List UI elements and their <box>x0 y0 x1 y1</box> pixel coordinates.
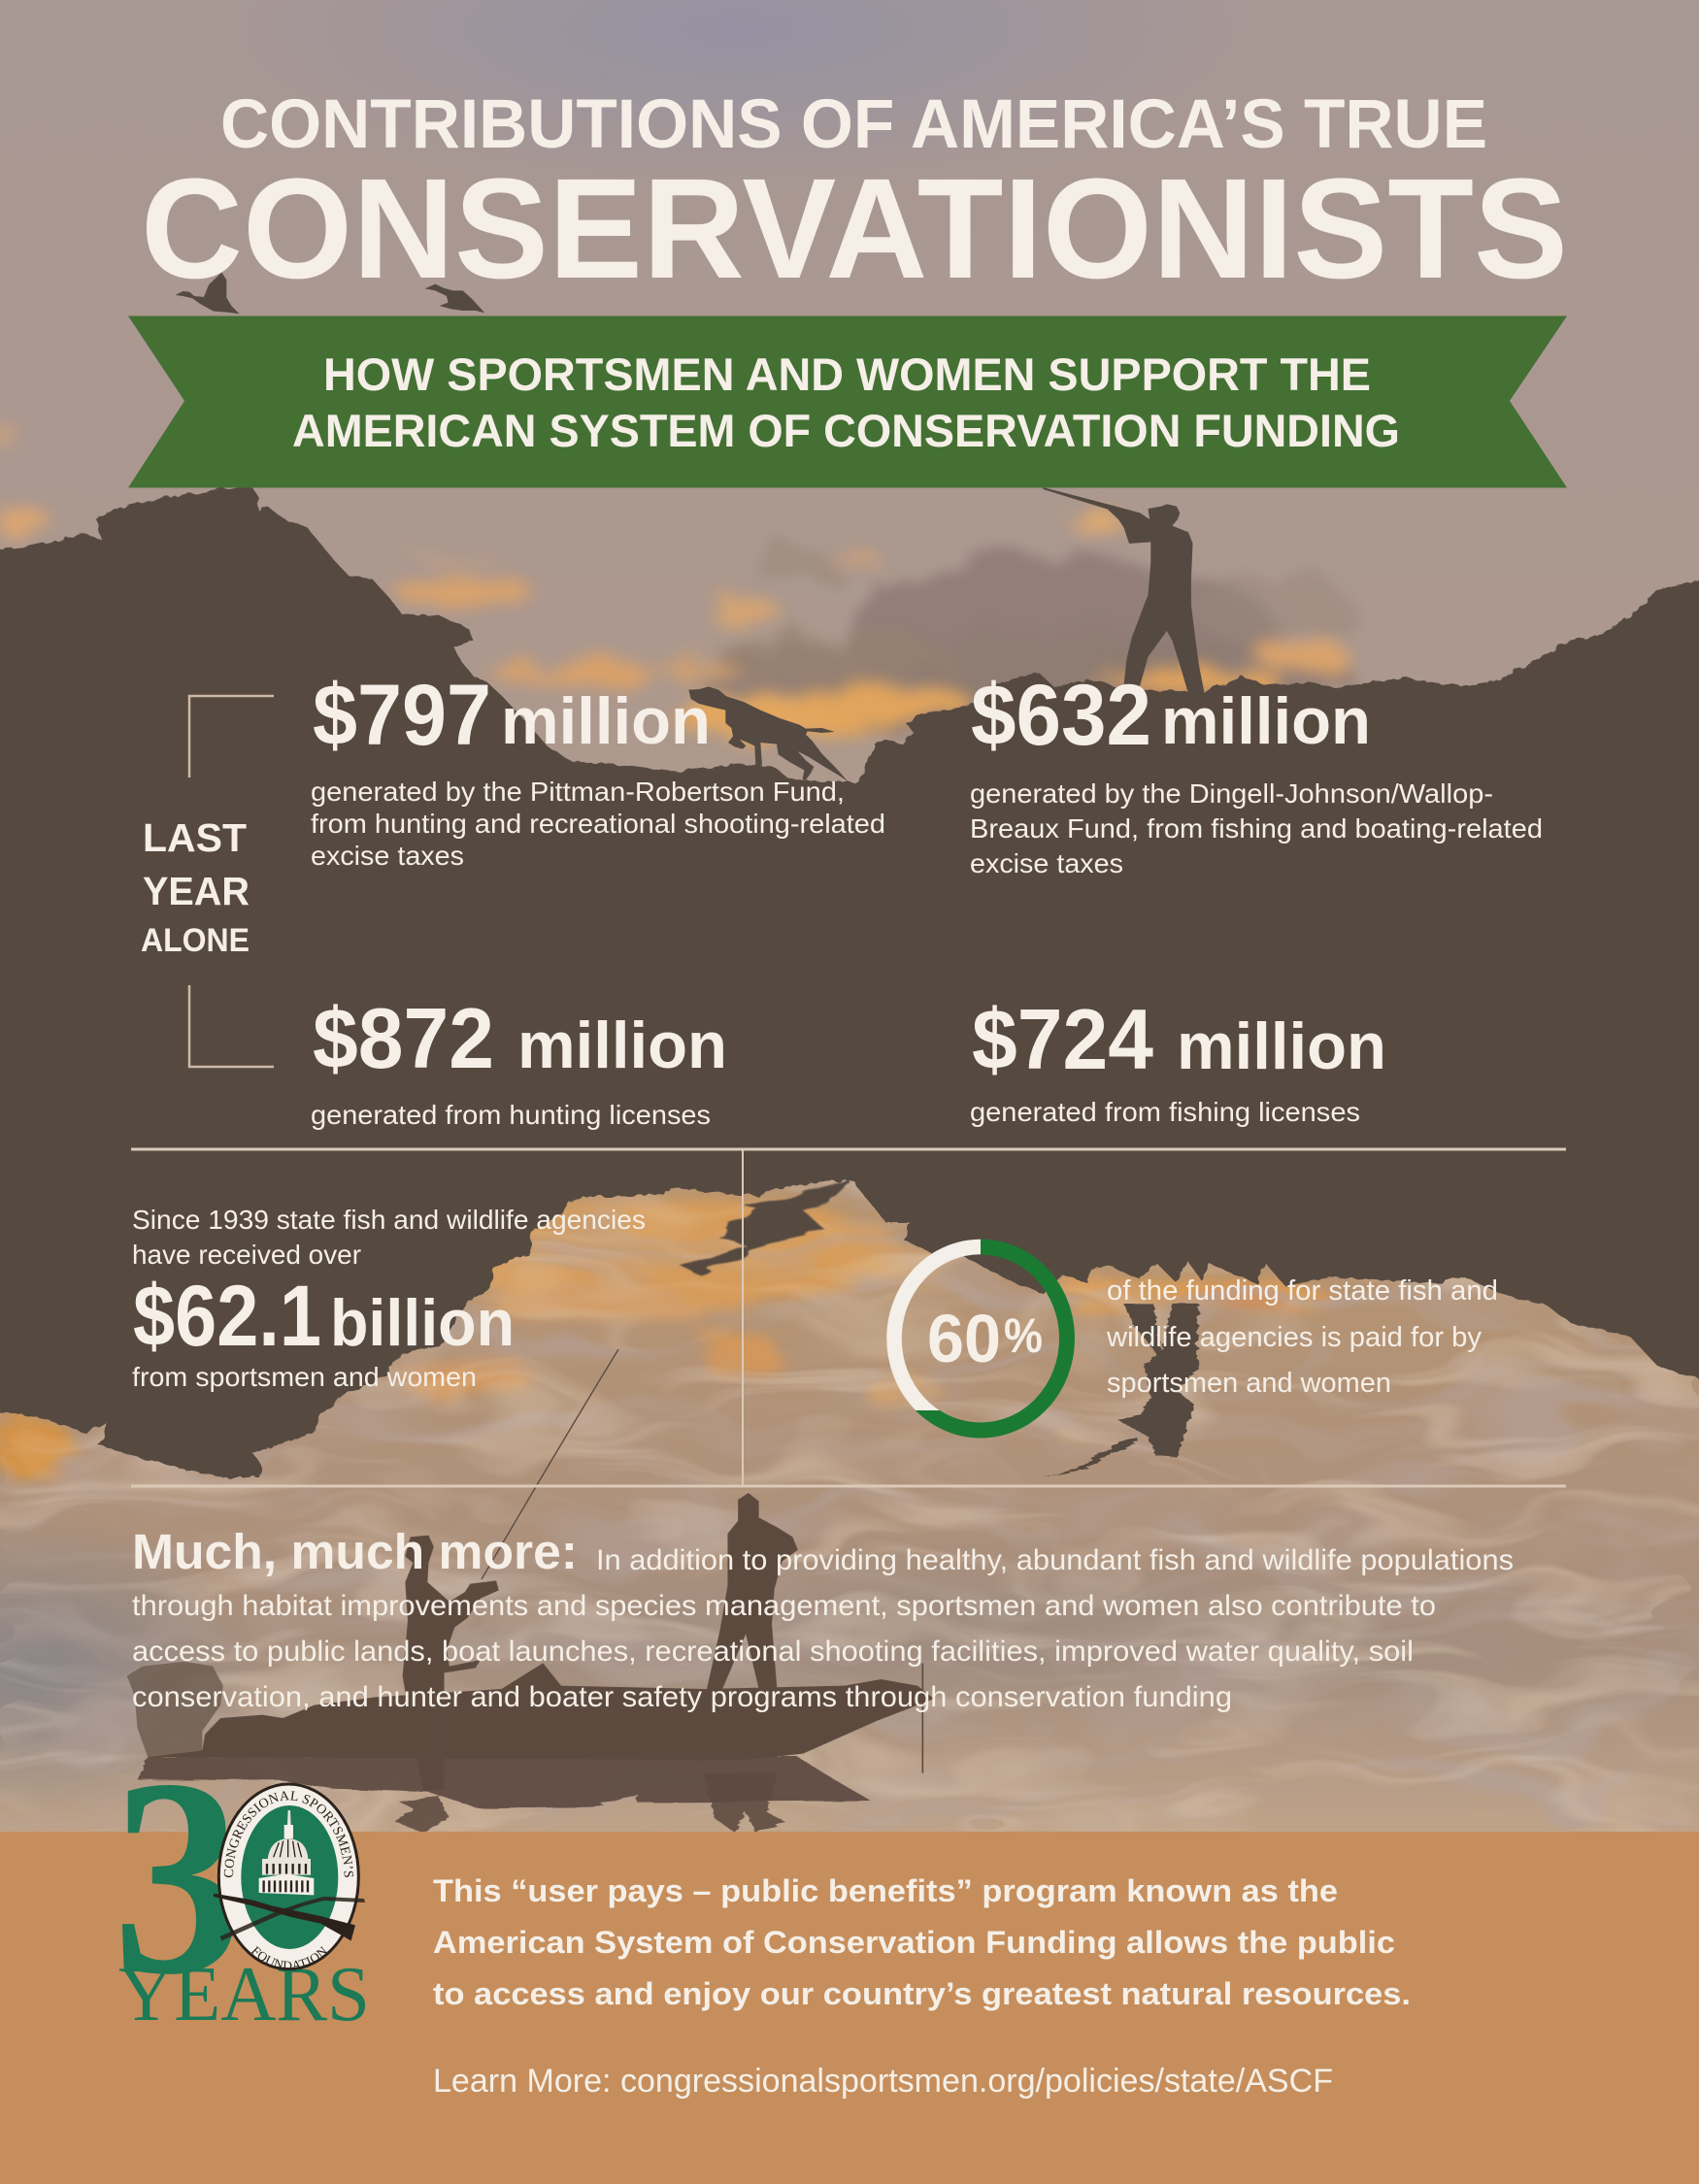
illustration: dog reflection in water <box>683 1179 852 1276</box>
illustration: fishing rod <box>482 1349 618 1579</box>
title <box>141 86 1568 309</box>
chart: 60 percent donut <box>894 1246 1067 1431</box>
title line 1: CONTRIBUTIONS OF AMERICA’S TRUE <box>220 86 1487 163</box>
logo seal: FOUNDATION <box>250 1945 326 1968</box>
text block: much, much more: through habitat improvements and species management, sportsmen and women also contribute to <box>132 1590 1436 1622</box>
logo seal: CONGRESSIONAL SPORTSMEN’S <box>223 1791 353 1877</box>
title line 2: CONSERVATIONISTS <box>141 149 1568 309</box>
stat: $797 million: $797 <box>313 666 491 763</box>
stat: $62.1 billion: have received over <box>132 1240 361 1270</box>
stat: $872 million: $872 <box>313 990 494 1086</box>
text: funding share: of the funding for state fish and <box>1107 1275 1498 1307</box>
text block: much, much more: access to public lands, boat launches, recreational shooting facilities, improved water quality, soil <box>132 1636 1414 1668</box>
stat: $872 million: million <box>517 1009 727 1082</box>
capitol dome <box>259 1810 314 1895</box>
label: last year alone: ALONE <box>141 922 250 959</box>
illustration: hunter with shotgun <box>1043 487 1205 694</box>
text block: much, much more: conservation, and hunter and boater safety programs through conservation funding <box>132 1681 1232 1713</box>
stat: $62.1 billion: Since 1939 state fish and wildlife agencies <box>132 1205 646 1235</box>
stat: $724 million: $724 <box>972 991 1153 1087</box>
illustration: pointing dog <box>688 686 848 781</box>
banner text line 1: HOW SPORTSMEN AND WOMEN SUPPORT THE <box>323 348 1371 400</box>
stat: $724 million <box>970 991 1386 1127</box>
footer text: user pays public benefits: to access and enjoy our country’s greatest natural resources. <box>433 1976 1411 2011</box>
stat: $797 million: generated by the Pittman-Robertson Fund, <box>311 777 845 807</box>
footer text: user pays public benefits: This “user pays – public benefits” program known as the <box>433 1873 1338 1908</box>
stat: $797 million <box>311 666 885 871</box>
label: last year alone: YEAR <box>143 869 250 913</box>
text: funding share: wildlife agencies is paid for by <box>1106 1322 1482 1353</box>
donut percent sign: % <box>1004 1308 1043 1363</box>
text: funding share <box>1106 1275 1498 1399</box>
logo numeral 3: 3 <box>113 1722 242 2033</box>
stat: $872 million <box>311 990 727 1130</box>
bracket: bottom <box>189 985 274 1067</box>
donut value: 60 <box>927 1301 1001 1376</box>
illustration: bass boat with two anglers <box>127 1493 934 1833</box>
text block: much, much more <box>132 1524 1514 1713</box>
stat: $62.1 billion <box>132 1205 646 1392</box>
text block: much, much more: In addition to providing healthy, abundant fish and wildlife populations <box>596 1544 1514 1576</box>
label: last year alone: LAST <box>143 815 247 860</box>
stat: $632 million <box>970 666 1543 878</box>
stat: $62.1 billion: $62.1 <box>133 1267 321 1364</box>
bracket: top <box>189 696 274 778</box>
banner text line 2: AMERICAN SYSTEM OF CONSERVATION FUNDING <box>292 405 1400 456</box>
footer text: user pays public benefits: American System of Conservation Funding allows the public <box>433 1925 1395 1960</box>
background: sunset sky <box>0 0 1699 1194</box>
stat: $724 million: million <box>1177 1009 1386 1083</box>
icon: flying duck left <box>176 273 240 314</box>
stat: $872 million: generated from hunting licenses <box>311 1100 711 1130</box>
footer link: learn more: Learn More: congressionalsportsmen.org/policies/state/ASCF <box>433 2063 1333 2100</box>
background: rippled water <box>0 1165 1699 1835</box>
stat: $797 million: excise taxes <box>311 841 464 871</box>
logo: 30 years congressional sportsmen's foundation <box>113 1722 370 2037</box>
footer text: user pays public benefits <box>433 1873 1411 2011</box>
logo seal <box>214 1782 365 1970</box>
stat: $632 million: generated by the Dingell-Johnson/Wallop- <box>970 778 1493 809</box>
stat: $797 million: million <box>501 684 711 758</box>
text block: much, much more: Much, much more: <box>132 1524 578 1579</box>
crossed shotguns <box>214 1894 365 1940</box>
stat: $632 million: Breaux Fund, from fishing and boating-related <box>970 813 1543 844</box>
illustration: dark land silhouette <box>0 488 1699 1477</box>
stat: $724 million: generated from fishing licenses <box>970 1097 1360 1127</box>
stat: $62.1 billion: from sportsmen and women <box>132 1362 477 1392</box>
stat: $797 million: from hunting and recreational shooting-related <box>311 809 885 839</box>
stat: $632 million: excise taxes <box>970 848 1123 878</box>
text: funding share: sportsmen and women <box>1107 1368 1391 1399</box>
stat: $632 million: $632 <box>971 666 1151 763</box>
stat: $632 million: million <box>1161 684 1371 758</box>
banner: subtitle ribbon <box>128 316 1567 487</box>
illustration: hunter reflection in water <box>1043 1304 1199 1478</box>
logo word YEARS: YEARS <box>118 1952 370 2037</box>
label: last year alone <box>141 815 250 959</box>
footer panel <box>0 1832 1699 2184</box>
icon: flying duck right <box>425 284 484 313</box>
stat: $62.1 billion: billion <box>330 1286 515 1360</box>
